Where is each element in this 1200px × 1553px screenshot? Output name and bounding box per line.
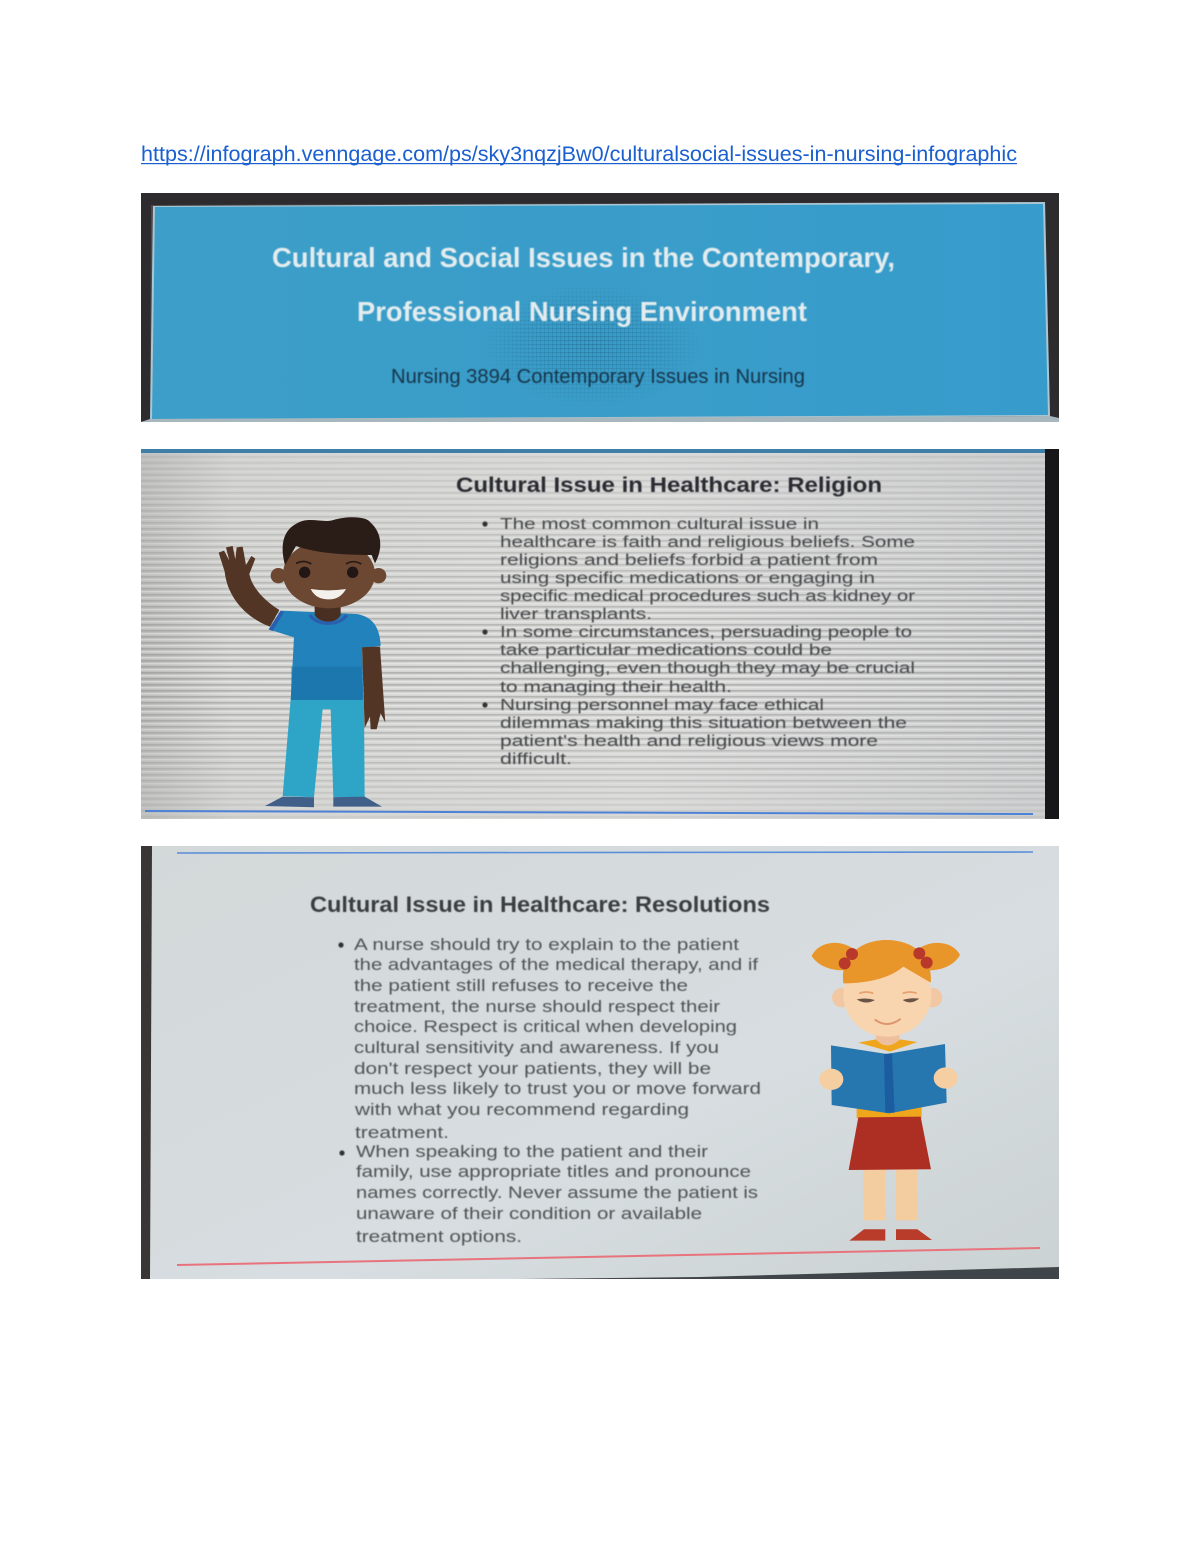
hair bbox=[843, 940, 931, 983]
hair bbox=[283, 517, 380, 565]
book bbox=[831, 1044, 947, 1113]
panel: religion bbox=[141, 449, 1059, 819]
resolutions bullets: much less likely to trust you or move forward bbox=[354, 1079, 761, 1098]
religion bullets: using specific medications or engaging in bbox=[500, 570, 875, 587]
eyes bbox=[857, 998, 875, 1003]
shoes bbox=[265, 797, 314, 807]
resolutions bullets: unaware of their condition or available bbox=[356, 1204, 702, 1223]
religion bullets: to managing their health. bbox=[500, 679, 732, 696]
religion bullets: The most common cultural issue in bbox=[500, 516, 819, 533]
religion bullets: liver transplants. bbox=[500, 606, 652, 623]
shoes bbox=[849, 1229, 885, 1241]
lowered arm bbox=[362, 647, 385, 729]
face bbox=[843, 953, 931, 1037]
trousers bbox=[283, 699, 365, 797]
religion heading: Cultural Issue in Healthcare: Religion bbox=[456, 474, 882, 497]
banner title bbox=[272, 242, 895, 327]
illustration: waving boy bbox=[219, 517, 386, 807]
panel: resolutions bbox=[141, 846, 1059, 1279]
resolutions bullets: treatment, the nurse should respect their bbox=[354, 997, 720, 1016]
illustration: girl reading bbox=[812, 940, 960, 1241]
banner title: Cultural and Social Issues in the Contemporary, bbox=[272, 242, 895, 273]
resolutions bullets: When speaking to the patient and their bbox=[356, 1142, 708, 1161]
legs bbox=[863, 1168, 885, 1220]
resolutions bullets: with what you recommend regarding bbox=[354, 1100, 689, 1119]
raised arm bbox=[219, 546, 279, 627]
skirt bbox=[849, 1117, 931, 1170]
religion bullets: healthcare is faith and religious beliefs. Some bbox=[500, 534, 915, 551]
banner subtitle: Nursing 3894 Contemporary Issues in Nursing bbox=[391, 366, 805, 388]
resolutions bullets: cultural sensitivity and awareness. If you bbox=[354, 1038, 719, 1057]
religion bullets bbox=[482, 516, 915, 768]
resolutions bullets: family, use appropriate titles and pronounce bbox=[356, 1162, 751, 1181]
document page bbox=[141, 146, 1059, 1279]
pigtails bbox=[812, 943, 855, 970]
resolutions bullets: choice. Respect is critical when developing bbox=[354, 1017, 737, 1036]
resolutions bullets: don't respect your patients, they will be bbox=[354, 1059, 711, 1078]
ears bbox=[271, 568, 286, 583]
resolutions bullets: treatment options. bbox=[356, 1227, 522, 1246]
religion bullets: Nursing personnel may face ethical bbox=[500, 697, 824, 714]
religion bullets: specific medical procedures such as kidney or bbox=[500, 588, 915, 605]
panel: title banner bbox=[141, 193, 1059, 422]
religion bullets: In some circumstances, persuading people to bbox=[500, 624, 912, 641]
religion bullets: challenging, even though they may be crucial bbox=[500, 660, 915, 677]
resolutions bullets: names correctly. Never assume the patient is bbox=[356, 1183, 758, 1202]
neck bbox=[876, 1027, 899, 1047]
religion bullets: religions and beliefs forbid a patient from bbox=[500, 552, 878, 569]
religion bullets: dilemmas making this situation between the bbox=[500, 715, 907, 732]
eyes bbox=[299, 567, 310, 578]
shirt bbox=[269, 611, 381, 700]
face bbox=[283, 540, 375, 608]
hair ties bbox=[846, 948, 858, 960]
banner title: Professional Nursing Environment bbox=[357, 296, 807, 327]
blouse bbox=[857, 1107, 922, 1118]
resolutions bullets bbox=[338, 935, 761, 1246]
religion bullets: patient's health and religious views more bbox=[500, 733, 878, 750]
resolutions bullets: the advantages of the medical therapy, and if bbox=[354, 955, 758, 974]
neck bbox=[315, 603, 341, 622]
collar bbox=[858, 1039, 917, 1052]
source link: https://infograph.venngage.com/ps/sky3nqzjBw0/culturalsocial-issues-in-nursing-infographic bbox=[141, 143, 1017, 166]
resolutions bullets: A nurse should try to explain to the patient bbox=[354, 935, 739, 954]
resolutions heading: Cultural Issue in Healthcare: Resolutions bbox=[310, 892, 770, 917]
hands bbox=[819, 1069, 843, 1090]
resolutions bullets: the patient still refuses to receive the bbox=[354, 976, 688, 995]
smile bbox=[875, 1019, 900, 1024]
religion bullets: difficult. bbox=[500, 751, 572, 768]
religion bullets: take particular medications could be bbox=[500, 642, 832, 659]
ears bbox=[832, 988, 851, 1007]
resolutions bullets: treatment. bbox=[355, 1123, 449, 1142]
smile bbox=[311, 589, 346, 599]
